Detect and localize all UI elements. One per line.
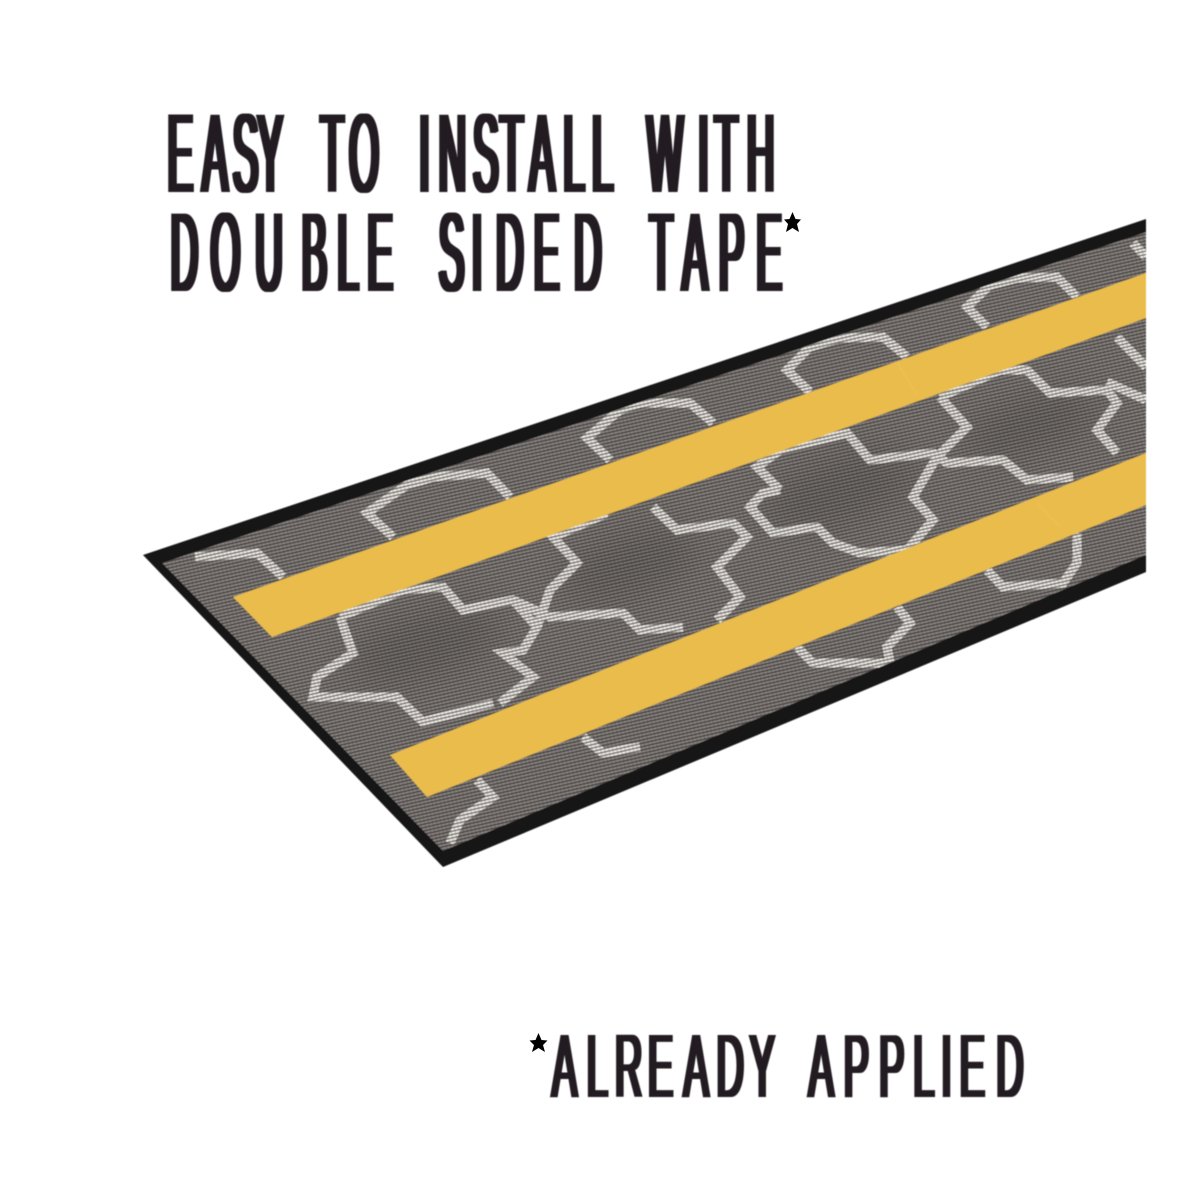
- rug with double sided tape strips: [143, 219, 1146, 867]
- heading: easy to install with double sided tape: EASY TO INSTALL WITH: [168, 90, 774, 216]
- weave texture: [162, 232, 1146, 851]
- tape strip: upper: [233, 273, 1146, 637]
- darker mottled diamonds: [352, 392, 1092, 688]
- trellis pattern: [195, 243, 1146, 843]
- heading: easy to install with double sided tape: [168, 90, 801, 315]
- heading: easy to install with double sided tape: DOUBLE SIDED TAPE: [171, 189, 782, 315]
- tape strip: lower: [390, 453, 1146, 797]
- rug woven field: [162, 232, 1146, 851]
- note: already applied: ALREADY APPLIED: [552, 1016, 1023, 1117]
- rug black binding: [143, 219, 1146, 867]
